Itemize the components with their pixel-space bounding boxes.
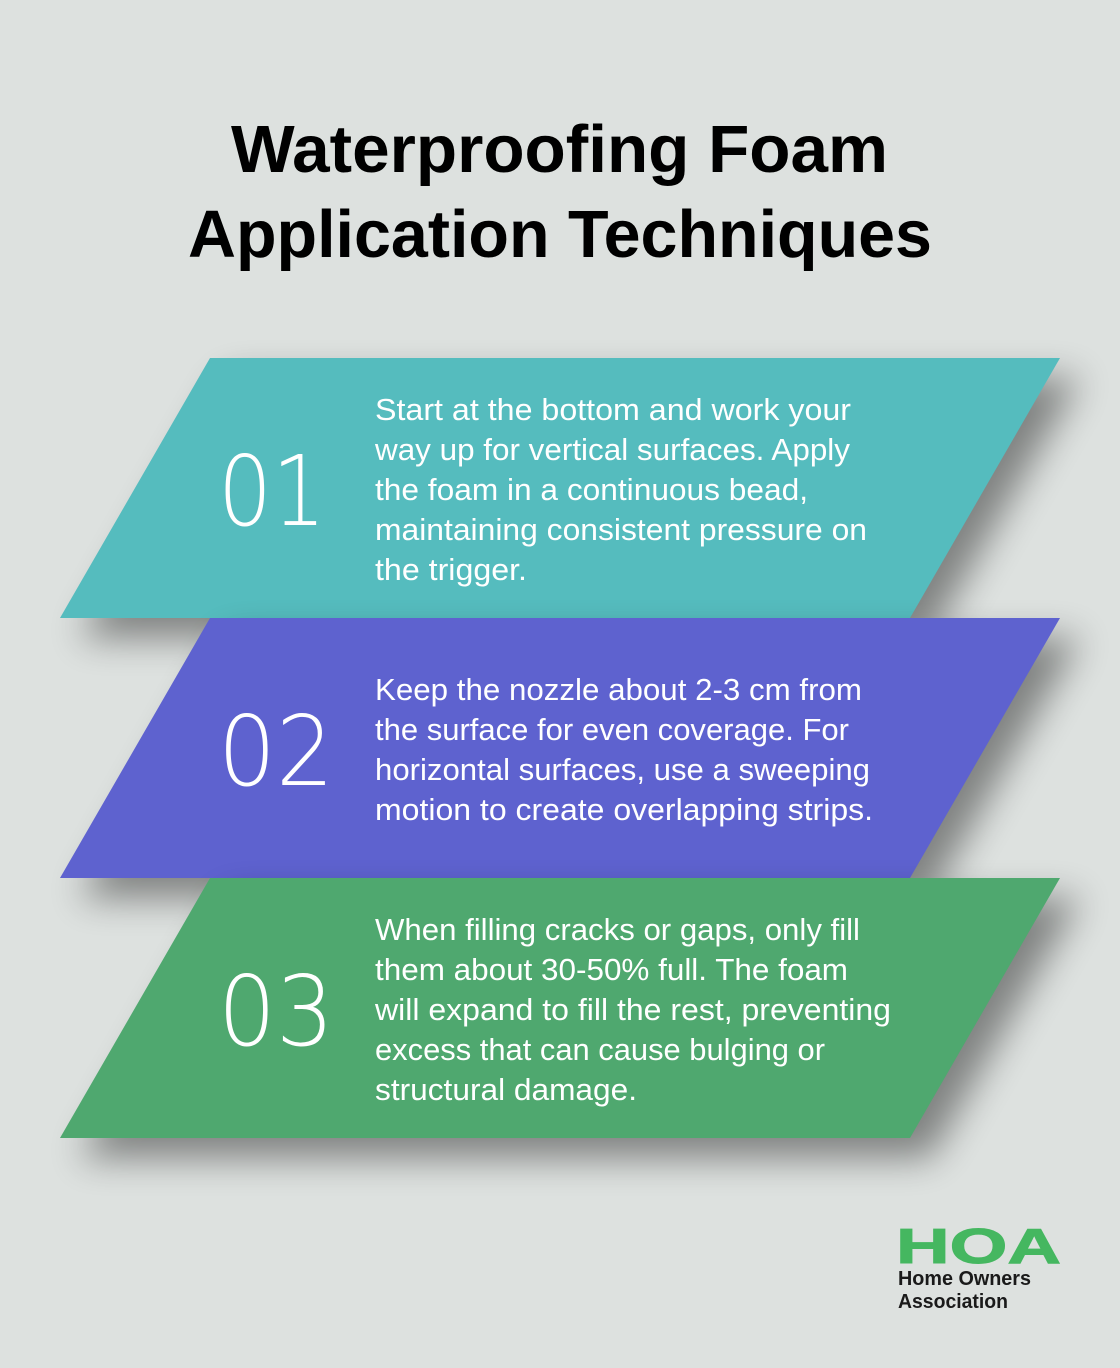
title	[188, 112, 932, 272]
text: step 02: motion to create overlapping strips.	[375, 792, 873, 827]
text: step 03: excess that can cause bulging or	[375, 1032, 825, 1067]
text: step 02	[375, 672, 873, 827]
title: Waterproofing Foam	[231, 112, 888, 187]
text: step 03: them about 30-50% full. The foam	[375, 952, 848, 987]
text: step 01: the foam in a continuous bead,	[375, 472, 808, 507]
text: step 01: the trigger.	[375, 552, 527, 587]
logo: Home Owners Association: Association	[898, 1291, 1008, 1313]
text: step 03: structural damage.	[375, 1072, 637, 1107]
panel: step 01	[60, 358, 1080, 638]
logo: Home Owners Association	[896, 1220, 1061, 1313]
text: step 03: When filling cracks or gaps, only fill	[375, 912, 860, 947]
text: step 02: horizontal surfaces, use a sweeping	[375, 752, 870, 787]
number 01: 01	[218, 435, 326, 548]
text: step 01	[374, 392, 867, 587]
panel: step 03	[60, 878, 1080, 1158]
text: step 01: maintaining consistent pressure on	[375, 512, 867, 547]
panel: step 02	[60, 618, 1080, 898]
text: step 03: will expand to fill the rest, preventing	[374, 992, 891, 1027]
logo: Home Owners Association: Home Owners	[898, 1268, 1031, 1290]
logo: Home Owners Association: HOA	[896, 1220, 1061, 1274]
number 02: 02	[218, 695, 334, 808]
text: step 01: way up for vertical surfaces. Apply	[374, 432, 850, 467]
text: step 02: Keep the nozzle about 2-3 cm from	[375, 672, 862, 707]
text: step 02: the surface for even coverage. For	[375, 712, 849, 747]
title: Application Techniques	[188, 197, 932, 272]
text: step 03	[374, 912, 891, 1107]
text: step 01: Start at the bottom and work your	[375, 392, 851, 427]
number 03: 03	[218, 955, 334, 1068]
